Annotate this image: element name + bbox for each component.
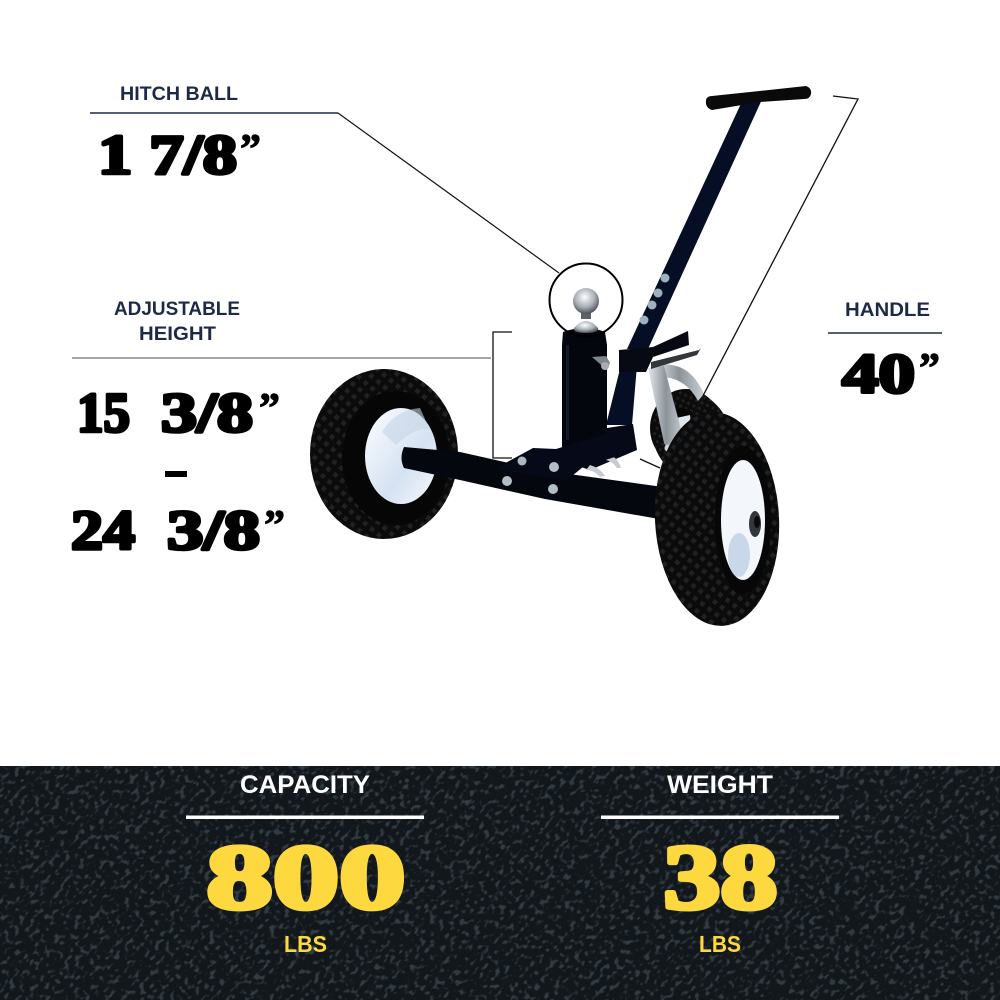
hitch ball callout: ”	[240, 127, 261, 173]
bottom band: textured dark panel	[0, 766, 1000, 1000]
adjustable height callout: HEIGHT	[139, 323, 216, 345]
pull pin	[592, 356, 610, 370]
vertical post	[562, 328, 607, 447]
hitch ball	[573, 288, 599, 333]
hitch ball callout	[90, 83, 622, 336]
support strut	[560, 424, 637, 470]
hook pins	[586, 455, 621, 477]
hitch ball callout: HITCH BALL	[120, 83, 238, 105]
adjustable height callout: ”	[259, 386, 280, 432]
handle callout: 40	[842, 344, 915, 406]
capacity stat: LBS	[284, 931, 327, 957]
lower frame tube	[606, 365, 637, 425]
weight stat	[601, 771, 839, 957]
handle	[627, 86, 811, 349]
caster fork	[648, 348, 704, 457]
capacity stat	[186, 771, 424, 957]
adjustable height callout: 3/8	[167, 500, 260, 562]
handle callout: HANDLE	[845, 299, 930, 321]
handle callout	[640, 96, 942, 468]
adjustable height callout: 24	[71, 500, 135, 562]
hitch ball callout: 1 7/8	[98, 124, 237, 186]
trailer dolly product illustration	[310, 86, 811, 629]
weight stat: LBS	[699, 931, 741, 957]
bracket	[619, 331, 689, 372]
adjustable height callout: 3/8	[161, 382, 253, 444]
weight stat: WEIGHT	[667, 771, 773, 799]
handle bolts	[640, 274, 670, 324]
right wheel	[649, 409, 785, 629]
adjustable height callout: ”	[264, 503, 285, 549]
capacity stat: CAPACITY	[240, 771, 370, 799]
weight stat: 38	[664, 826, 778, 928]
adjustable height callout: 15	[77, 382, 130, 444]
axle	[402, 428, 663, 519]
caster wheel	[650, 389, 723, 467]
left wheel	[310, 369, 458, 539]
axle bolts	[502, 456, 559, 494]
adjustable height callout	[71, 298, 512, 562]
capacity stat: 800	[206, 826, 406, 928]
base plate	[500, 428, 637, 480]
handle callout: ”	[919, 346, 940, 392]
adjustable height callout: ADJUSTABLE	[114, 298, 240, 320]
